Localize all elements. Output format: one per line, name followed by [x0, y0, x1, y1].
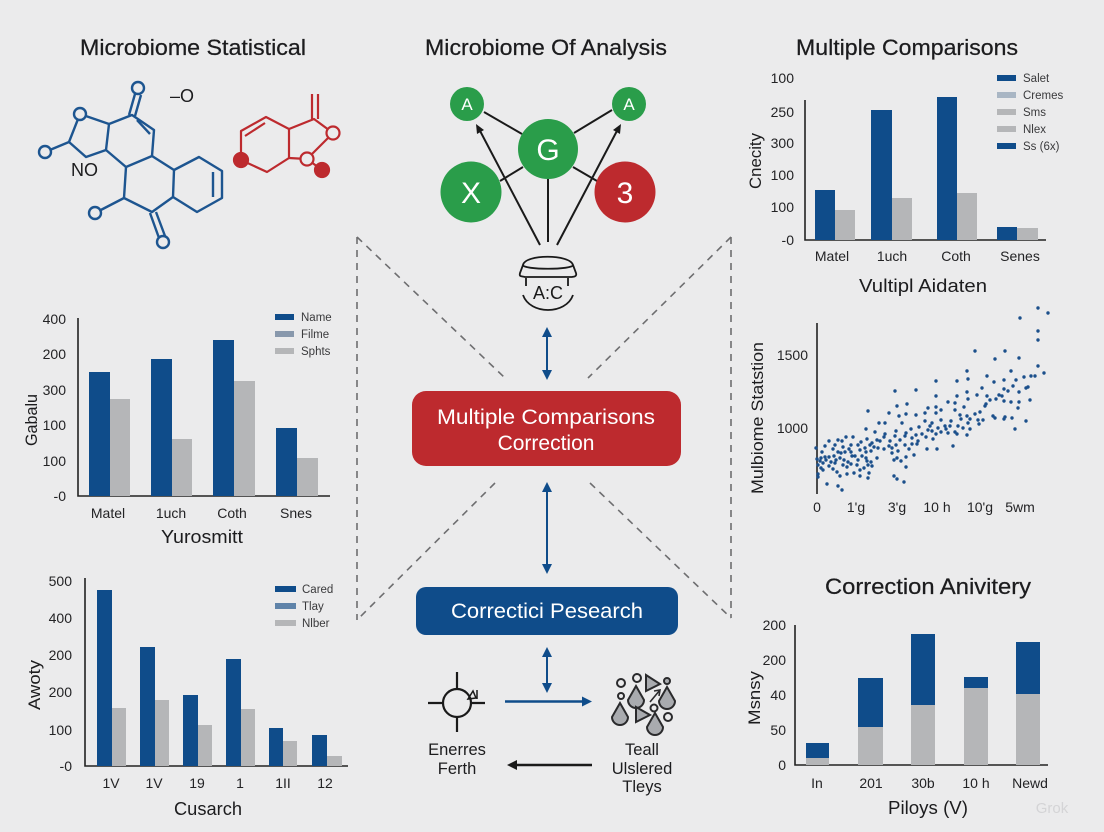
watermark: Grok: [1036, 800, 1069, 817]
node A left: A: [461, 95, 473, 114]
y axis label: Mulbiome Statstion: [748, 342, 767, 494]
scatter plot: 1'g: [847, 499, 865, 515]
bar chart: bottom left: 100: [49, 722, 72, 738]
legend: Nlber: [302, 618, 330, 630]
bar chart: bottom left: 200: [49, 647, 72, 663]
scatter plot: 1000: [777, 420, 808, 436]
scatter points: [816, 308, 1048, 490]
network diagram: [440, 87, 656, 245]
bar chart: bottom left: 1V: [102, 775, 120, 791]
bar chart: top right: 250: [771, 104, 794, 120]
bar chart: top right: -0: [782, 232, 794, 248]
legend: Sphts: [301, 346, 331, 358]
scatter plot: 10 h: [923, 499, 951, 515]
node G: [518, 119, 578, 179]
bar chart: left middle: 1uch: [156, 505, 186, 521]
icon: circular reference symbol: [428, 672, 485, 732]
label: NO: NO: [71, 160, 98, 180]
bar chart: left middle: 100: [43, 453, 66, 469]
text: Teall Ulslered Tleys: Ulslered: [612, 760, 672, 778]
arrow: double up-down top: [542, 327, 552, 380]
text: Enerres Ferth: Ferth: [438, 760, 476, 778]
node X: X: [461, 177, 481, 210]
text: Enerres Ferth: [428, 741, 486, 778]
bar chart: top right: Senes: [1000, 248, 1040, 264]
stacked bar chart: bottom right: 200: [763, 617, 786, 633]
legend: Sms: [1023, 107, 1046, 119]
node A left: [450, 87, 484, 121]
bar chart: bottom left: 12: [317, 775, 333, 791]
heading: Piloys (V): Piloys (V): [888, 798, 968, 818]
legend: Cremes: [1023, 90, 1064, 102]
bar chart: left middle: 100: [43, 417, 66, 433]
icon: particle cluster: [612, 674, 675, 735]
heading: Vultipl Aidaten: Vultipl Aidaten: [859, 276, 987, 296]
node A right: [612, 87, 646, 121]
bar chart: top right: Coth: [941, 248, 971, 264]
legend: Tlay: [302, 601, 324, 613]
scatter plot: [748, 308, 1048, 515]
stacked bar chart: bottom right: 0: [778, 757, 786, 773]
stacked bar chart: bottom right: 10 h: [962, 775, 990, 791]
scatter plot: 3'g: [888, 499, 906, 515]
text: Teall Ulslered Tleys: Teall: [625, 741, 659, 759]
box: Correctici Pesearch: Correctici Pesearch: [451, 600, 643, 623]
arrow: double up-down bottom: [542, 647, 552, 693]
title: Microbiome Of Analysis: Microbiome Of Analysis: [425, 35, 667, 60]
bar chart: bottom left: 1II: [275, 775, 291, 791]
legend: Nlex: [1023, 124, 1046, 136]
bar chart: top right: [746, 70, 1064, 264]
bar chart: left middle: Snes: [280, 505, 312, 521]
icon: A:C cap figure: [520, 257, 576, 310]
box: Correctici Pesearch: [416, 587, 678, 635]
icon: red molecule: [234, 94, 340, 177]
bar chart: bottom left: [25, 573, 348, 791]
legend: [997, 73, 1064, 153]
icon: A:C cap figure: A:C: [533, 283, 563, 303]
bar chart: left middle: -0: [54, 488, 66, 504]
bar chart: left middle: 300: [43, 382, 66, 398]
legend: [275, 584, 333, 630]
bar chart: top right: 300: [771, 135, 794, 151]
bar chart: bottom left: 1: [236, 775, 244, 791]
y axis label: Awoty: [25, 659, 44, 710]
node 3: 3: [617, 177, 633, 210]
y axis label: Gabalu: [22, 394, 41, 446]
bar chart: bottom left: -0: [60, 758, 72, 774]
bar chart: left middle: [22, 311, 332, 521]
legend: [275, 312, 332, 358]
scatter plot: 5wm: [1005, 499, 1035, 515]
box: Multiple Comparisons Correction: Correction: [498, 432, 594, 455]
legend: Cared: [302, 584, 333, 596]
node G: G: [536, 134, 560, 167]
heading: Cusarch: Cusarch: [174, 799, 242, 819]
stacked bar chart: bottom right: 30b: [911, 775, 935, 791]
bar chart: top right: 1uch: [877, 248, 907, 264]
title: Multiple Comparisons: Multiple Comparisons: [796, 35, 1018, 60]
heading: Yurosmitt: Yurosmitt: [161, 527, 243, 547]
bar chart: top right: 100: [771, 70, 794, 86]
scatter plot: 1500: [777, 347, 808, 363]
bar chart: left middle: 200: [43, 346, 66, 362]
bar chart: bottom left: 19: [189, 775, 205, 791]
bar chart: top right: 100: [771, 167, 794, 183]
text: Teall Ulslered Tleys: [612, 741, 672, 796]
bar chart: left middle: Matel: [91, 505, 125, 521]
bar chart: bottom left: 1V: [145, 775, 163, 791]
box: Multiple Comparisons Correction: [412, 391, 681, 466]
bar chart: bottom left: 500: [49, 573, 72, 589]
stacked bar chart: bottom right: Newd: [1012, 775, 1048, 791]
bar chart: left middle: 400: [43, 311, 66, 327]
label: -O: –O: [170, 86, 194, 106]
node A right: A: [623, 95, 635, 114]
node 3: [594, 162, 656, 222]
box: Multiple Comparisons Correction: Multiple Comparisons: [437, 406, 655, 429]
stacked bar chart: bottom right: [745, 617, 1048, 791]
scatter plot: 10'g: [967, 499, 993, 515]
legend: Ss (6x): [1023, 141, 1060, 153]
stacked bar chart: bottom right: In: [811, 775, 823, 791]
y axis label: Msnsy: [745, 670, 764, 725]
node X: [440, 162, 502, 222]
arrow: double up-down middle: [542, 482, 552, 574]
y axis label: Cnecity: [746, 133, 765, 189]
dashed connector lines: [357, 237, 731, 620]
arrow: left black: [507, 760, 592, 770]
stacked bar chart: bottom right: 50: [770, 722, 786, 738]
bar chart: top right: 100: [771, 199, 794, 215]
bar chart: bottom left: 200: [49, 684, 72, 700]
stacked bar chart: bottom right: 40: [770, 687, 786, 703]
arrow: right blue: [505, 696, 592, 706]
bar chart: top right: Matel: [815, 248, 849, 264]
scatter plot: 0: [813, 499, 821, 515]
legend: Name: [301, 312, 332, 324]
heading: Correction Anivitery: Correction Anivitery: [825, 574, 1031, 599]
title: Microbiome Statistical: Microbiome Statistical: [80, 35, 306, 60]
text: Teall Ulslered Tleys: Tleys: [622, 778, 662, 796]
stacked bar chart: bottom right: 201: [859, 775, 883, 791]
bar chart: left middle: Coth: [217, 505, 247, 521]
text: Enerres Ferth: Enerres: [428, 741, 486, 759]
bar chart: bottom left: 400: [49, 610, 72, 626]
legend: Salet: [1023, 73, 1050, 85]
icon: blue molecule: [39, 82, 222, 248]
stacked bar chart: bottom right: 200: [763, 652, 786, 668]
legend: Filme: [301, 329, 329, 341]
